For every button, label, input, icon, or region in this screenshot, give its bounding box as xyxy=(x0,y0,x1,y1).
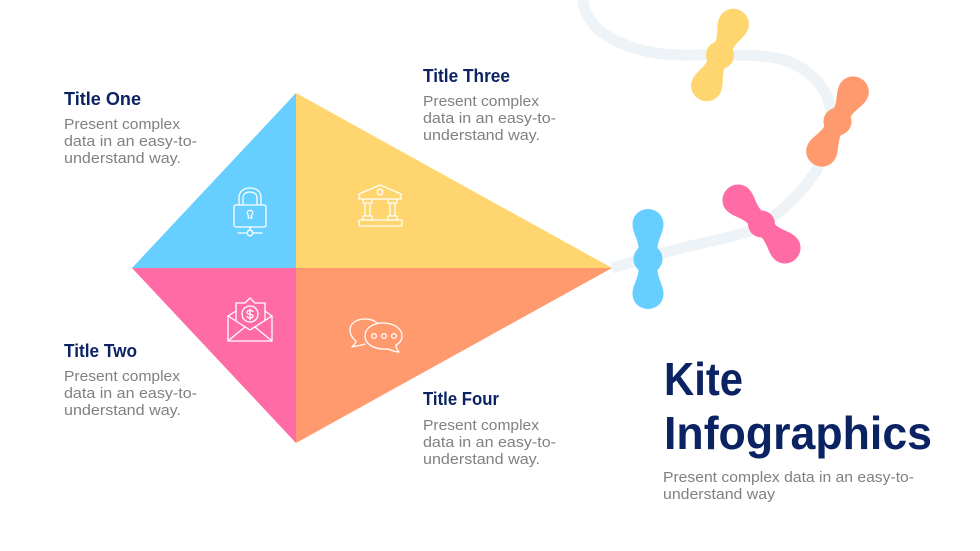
text block: title three: Title Three xyxy=(423,66,510,86)
main heading: Kite xyxy=(664,353,743,405)
icon: padlock xyxy=(234,188,266,236)
text block: title one: understand way. xyxy=(64,151,181,167)
kite panel: orange xyxy=(296,268,612,443)
kite panel: yellow xyxy=(296,93,612,268)
subtitle: Present complex data in an easy-to- xyxy=(663,470,914,486)
bow: yellow xyxy=(686,4,754,106)
text block: title four: Present complex xyxy=(423,418,540,434)
text block: title three xyxy=(423,66,556,144)
text block: title two: Present complex xyxy=(64,369,181,385)
text block: title three: data in an easy-to- xyxy=(423,111,556,127)
subtitle: understand way xyxy=(663,487,776,503)
kite string xyxy=(583,0,830,268)
text block: title one: Title One xyxy=(64,89,141,109)
main heading xyxy=(664,353,932,459)
text block: title two xyxy=(64,341,197,419)
text block: title four: Title Four xyxy=(423,389,499,409)
text block: title one: data in an easy-to- xyxy=(64,134,197,150)
kite panel: pink xyxy=(132,268,296,443)
bow: pink xyxy=(716,178,807,270)
text block: title four: understand way. xyxy=(423,452,540,468)
text block: title two: data in an easy-to- xyxy=(64,386,197,402)
bow: blue xyxy=(632,209,664,309)
text block: title four xyxy=(423,389,556,468)
text block: title three: understand way. xyxy=(423,128,540,144)
text block: title one: Present complex xyxy=(64,117,181,133)
text block: title three: Present complex xyxy=(423,94,540,110)
icon: envelope with dollar xyxy=(228,298,272,341)
kite panel: blue xyxy=(132,93,296,268)
icon: speech bubbles xyxy=(350,319,402,352)
icon: bank building xyxy=(359,185,402,226)
text block: title one xyxy=(64,89,197,167)
main heading: Infographics xyxy=(664,407,932,459)
text block: title two: Title Two xyxy=(64,341,137,361)
subtitle xyxy=(663,470,914,503)
bow: orange xyxy=(801,71,874,172)
text block: title two: understand way. xyxy=(64,403,181,419)
text block: title four: data in an easy-to- xyxy=(423,435,556,451)
kite body xyxy=(132,93,612,443)
